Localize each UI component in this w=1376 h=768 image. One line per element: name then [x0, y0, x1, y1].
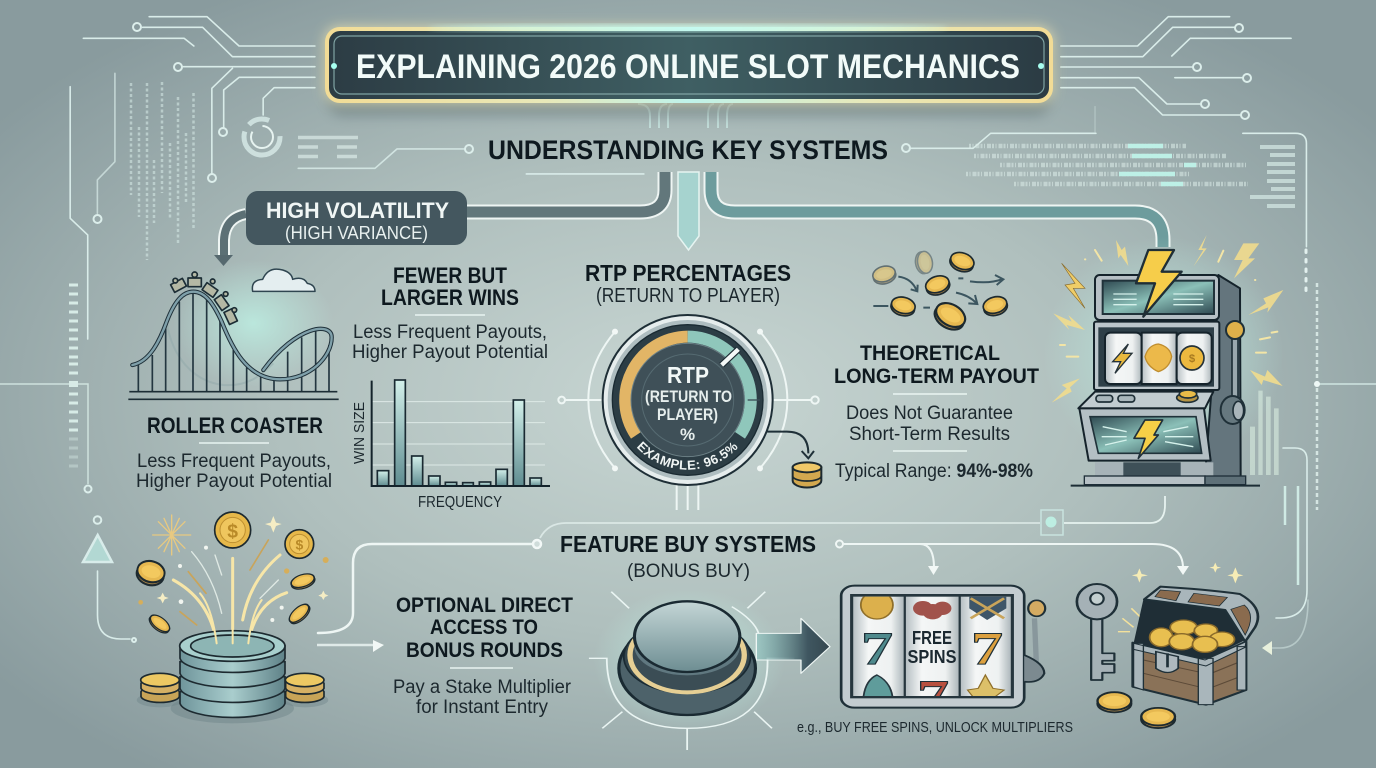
icon: bonus buy button	[589, 588, 830, 750]
free spins slot reels: 7	[971, 623, 1003, 675]
lightning bolts	[1052, 235, 1283, 403]
RTP gauge: RTP	[667, 362, 709, 388]
icon: treasure chest	[1098, 563, 1258, 728]
icon: slot machine with lightning	[1043, 235, 1283, 486]
example caption: e.g., BUY FREE SPINS, UNLOCK MULTIPLIERS	[797, 720, 1073, 736]
optional direct access text: OPTIONAL DIRECT	[396, 594, 573, 617]
roller coaster illustration	[128, 260, 339, 399]
high volatility pill	[214, 191, 467, 266]
RTP heading: RTP PERCENTAGES	[585, 260, 791, 286]
icon: slot machine with lightning: $	[1189, 353, 1196, 365]
slot lever	[1221, 321, 1245, 424]
roller coaster caption: Less Frequent Payouts,	[137, 451, 331, 472]
left circuit decoration	[0, 17, 644, 642]
bar chart: win size vs frequency	[351, 380, 550, 511]
optional direct access text: BONUS ROUNDS	[406, 639, 563, 662]
free spins slot reels	[841, 586, 1045, 723]
roller coaster caption: ROLLER COASTER	[147, 413, 323, 438]
optional direct access text: Pay a Stake Multiplier	[393, 677, 572, 698]
theoretical payout text: THEORETICAL	[860, 341, 1000, 365]
fewer but larger wins text: LARGER WINS	[381, 285, 519, 310]
bar chart: win size vs frequency: WIN SIZE	[351, 402, 368, 464]
theoretical payout text: Does Not Guarantee	[846, 403, 1013, 424]
optional direct access text: ACCESS TO	[430, 616, 538, 639]
icon: cloud	[252, 269, 315, 291]
optional direct access text	[393, 594, 573, 718]
free spins slot reels: 7	[917, 671, 949, 723]
bar chart: win size vs frequency: FREQUENCY	[418, 494, 502, 511]
free spins slot reels: 7	[861, 623, 893, 675]
icon: key	[1077, 584, 1117, 680]
title text: EXPLAINING 2026 ONLINE SLOT MECHANICS	[356, 48, 1020, 86]
icon: flying coins	[871, 249, 1009, 334]
theoretical payout text: Short-Term Results	[849, 424, 1010, 445]
roller coaster caption	[136, 413, 332, 492]
RTP heading	[585, 260, 791, 307]
free spins slot reels: FREE	[912, 628, 952, 648]
coaster cars	[171, 272, 237, 325]
feature buy heading: FEATURE BUY SYSTEMS	[560, 531, 816, 557]
theoretical payout text: Typical Range: 94%-98%	[835, 461, 1033, 482]
feature buy heading: (BONUS BUY)	[627, 561, 750, 582]
connector pipes	[462, 104, 1163, 250]
feature buy heading	[560, 531, 816, 582]
subtitle: UNDERSTANDING KEY SYSTEMS	[488, 135, 888, 165]
fewer but larger wins text: Higher Payout Potential	[352, 342, 548, 363]
icon: coin fountain on stacked discs	[134, 512, 329, 723]
theoretical payout text	[834, 341, 1039, 482]
high volatility pill: HIGH VOLATILITY	[266, 198, 449, 223]
icon: coin fountain on stacked discs: $	[295, 536, 303, 552]
feature buy connectors	[317, 496, 1189, 652]
title banner	[324, 25, 1054, 116]
icon: coin fountain on stacked discs: $	[227, 521, 238, 542]
right circuit decoration	[902, 17, 1376, 655]
roller coaster caption: Higher Payout Potential	[136, 471, 332, 492]
RTP heading: (RETURN TO PLAYER)	[596, 285, 780, 307]
RTP gauge: EXAMPLE: 96.5%	[636, 441, 738, 470]
fewer but larger wins text: FEWER BUT	[393, 263, 507, 288]
RTP gauge: %	[680, 425, 695, 444]
fewer but larger wins text	[352, 263, 548, 363]
high volatility pill: (HIGH VARIANCE)	[285, 223, 428, 243]
free spins slot reels: SPINS	[908, 647, 956, 667]
RTP gauge: (RETURN TO	[645, 387, 732, 406]
theoretical payout text: LONG-TERM PAYOUT	[834, 364, 1039, 388]
arrow to slot	[756, 618, 830, 673]
fewer but larger wins text: Less Frequent Payouts,	[353, 322, 547, 343]
RTP gauge: PLAYER)	[657, 405, 718, 424]
RTP gauge	[557, 314, 820, 510]
optional direct access text: for Instant Entry	[416, 697, 548, 718]
icon: coin stack	[793, 462, 821, 487]
